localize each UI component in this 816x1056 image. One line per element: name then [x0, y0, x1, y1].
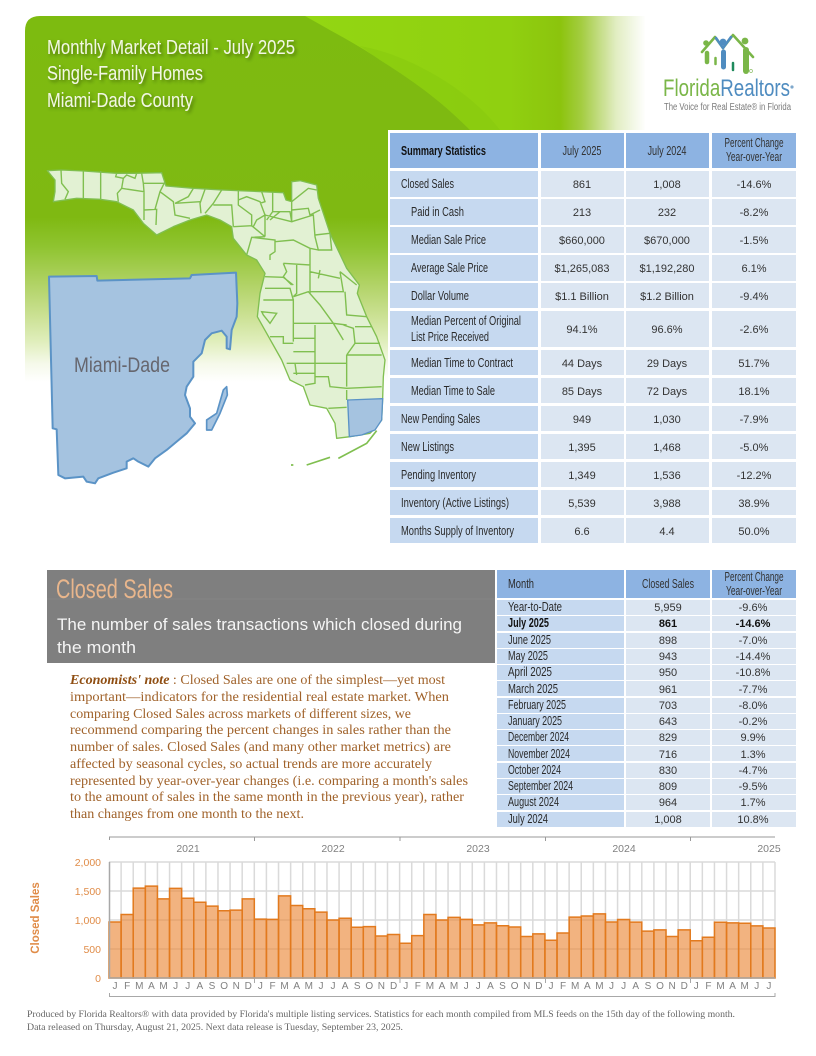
- row: Inventory (Active Listings): 3,988: [653, 498, 681, 510]
- highlighted county on state map: [348, 399, 383, 437]
- row: Pending Inventory: Pending Inventory: [401, 468, 477, 482]
- county lines: [61, 170, 382, 408]
- row: May 2025: [497, 649, 796, 664]
- x-axis baseline and ticks: [109, 862, 775, 996]
- row: Year-to-Date: [497, 600, 796, 615]
- row: May 2025: -14.4%: [736, 651, 771, 663]
- year axis with bracket and labels: 2023: [466, 843, 490, 855]
- row: Paid in Cash: 213: [573, 207, 591, 219]
- panel: monthly closed sales table: [497, 570, 796, 827]
- row: October 2024: 830: [659, 765, 677, 777]
- title: Single-Family Homes: [47, 63, 203, 85]
- row: Year-to-Date: Year-to-Date: [508, 600, 562, 614]
- title: Miami-Dade County: [47, 90, 193, 112]
- table header row: July 2025: [562, 144, 602, 158]
- row: Pending Inventory: [390, 462, 796, 487]
- heading: Closed Sales: Closed Sales: [56, 574, 173, 604]
- row: Paid in Cash: -8.2%: [740, 207, 769, 219]
- row: February 2025: [497, 698, 796, 713]
- row: February 2025: February 2025: [508, 698, 566, 712]
- footer note: Data released on Thursday, August 21, 2025. Next data release is Tuesday, September 23, 2025.: [27, 1022, 403, 1032]
- row: Median Percent of Original List Price Received: 94.1%: [566, 324, 598, 336]
- row: September 2024: September 2024: [508, 779, 573, 793]
- subheading description: the month: [57, 638, 136, 657]
- row: July 2025: July 2025: [508, 616, 549, 630]
- monthly table header: Percent Change: [724, 570, 784, 584]
- monthly table header: Closed Sales: [642, 577, 694, 591]
- row: Median Time to Sale: [390, 378, 796, 403]
- text block: economists' note: represented by year-over-year changes (i.e. comparing a month's sales: [70, 773, 468, 788]
- row: July 2024: 10.8%: [737, 814, 769, 826]
- row: Median Sale Price: $670,000: [644, 235, 690, 247]
- row: July 2024: [497, 812, 796, 827]
- row: Median Time to Contract: [390, 350, 796, 375]
- row: October 2024: October 2024: [508, 763, 561, 777]
- row: July 2025: [497, 616, 796, 631]
- table header row: Year-over-Year: [726, 150, 782, 164]
- row: Paid in Cash: 232: [658, 207, 676, 219]
- table header row: Summary Statistics: [401, 144, 486, 158]
- row: September 2024: [497, 779, 796, 794]
- text block: economists' note: affected by seasonal cycles, so actual trends are more accurately: [70, 756, 432, 771]
- monthly table header: [497, 570, 796, 598]
- row: Average Sale Price: Average Sale Price: [411, 261, 488, 275]
- row: April 2025: [497, 665, 796, 680]
- icon: Florida Realtors logo: [663, 35, 794, 113]
- title: [47, 37, 295, 112]
- row: Median Time to Contract: 51.7%: [738, 358, 770, 370]
- title: Monthly Market Detail - July 2025: [47, 37, 295, 59]
- icon: houses and people mark: [702, 35, 753, 72]
- row: January 2025: January 2025: [508, 714, 562, 728]
- row: Pending Inventory: 1,536: [653, 470, 681, 482]
- row: Months Supply of Inventory: [390, 518, 796, 543]
- row: Inventory (Active Listings): Inventory (Active Listings): [401, 496, 509, 510]
- year axis with bracket and labels: 2024: [612, 843, 636, 855]
- row: May 2025: May 2025: [508, 649, 548, 663]
- y-axis labels: [75, 857, 101, 985]
- row: Median Percent of Original List Price Received: List Price Received: [411, 330, 489, 344]
- row: New Listings: -5.0%: [740, 442, 769, 454]
- year axis with bracket and labels: 2022: [321, 843, 345, 855]
- y-axis labels: 0: [95, 973, 101, 985]
- row: Year-to-Date: 5,959: [654, 602, 682, 614]
- row: March 2025: 961: [659, 684, 677, 696]
- row: February 2025: -8.0%: [739, 700, 768, 712]
- year axis with bracket and labels: [110, 837, 781, 855]
- row: Median Sale Price: $660,000: [559, 235, 605, 247]
- row: January 2025: [497, 714, 796, 729]
- row: Closed Sales: [390, 171, 796, 197]
- row: Pending Inventory: 1,349: [568, 470, 596, 482]
- map label: Miami-Dade: Miami-Dade: [74, 354, 170, 377]
- row: Median Sale Price: Median Sale Price: [411, 233, 486, 247]
- row: July 2024: 1,008: [654, 814, 682, 826]
- row: September 2024: -9.5%: [739, 781, 768, 793]
- row: Dollar Volume: -9.4%: [740, 291, 769, 303]
- row: November 2024: 716: [659, 749, 677, 761]
- row: August 2024: 1.7%: [740, 797, 766, 809]
- row: Average Sale Price: [390, 255, 796, 281]
- month labels: JFMAMJJASONDJFMAMJJASONDJFMAMJJASONDJFMAMJJASONDJFMAMJJ: [112, 981, 771, 992]
- row: April 2025: 950: [659, 667, 677, 679]
- row: Closed Sales: -14.6%: [737, 179, 772, 191]
- row: Dollar Volume: $1.2 Billion: [640, 291, 694, 303]
- text block: economists' note: recommend comparing the percent changes in sales rather than the: [70, 722, 451, 737]
- row: March 2025: [497, 681, 796, 696]
- row: New Pending Sales: -7.9%: [740, 414, 769, 426]
- logo registered mark: [790, 85, 794, 89]
- row: Median Sale Price: [390, 227, 796, 253]
- row: August 2024: 964: [659, 797, 677, 809]
- text block: economists' note: than changes from one month to the next.: [70, 806, 304, 821]
- y-axis labels: 1,000: [75, 915, 101, 927]
- row: Months Supply of Inventory: Months Supply of Inventory: [401, 524, 515, 538]
- row: Median Percent of Original List Price Received: [390, 311, 796, 347]
- table header row: July 2024: [648, 144, 687, 158]
- row: July 2025: 861: [659, 618, 677, 630]
- row: Median Time to Sale: 72 Days: [647, 386, 688, 398]
- row: January 2025: 643: [659, 716, 677, 728]
- row: Median Time to Sale: Median Time to Sale: [411, 384, 495, 398]
- row: December 2024: 9.9%: [740, 732, 766, 744]
- text block: economists' note: comparing Closed Sales across markets of different sizes, we: [70, 706, 411, 721]
- text block: economists' note: [69, 672, 468, 821]
- row: October 2024: [497, 763, 796, 778]
- row: Median Time to Contract: 44 Days: [562, 358, 603, 370]
- row: Inventory (Active Listings): [390, 490, 796, 515]
- row: Average Sale Price: 6.1%: [741, 263, 767, 275]
- row: Inventory (Active Listings): 38.9%: [738, 498, 770, 510]
- row: Pending Inventory: -12.2%: [737, 470, 772, 482]
- text block: economists' note: Economists' note : Closed Sales are one of the simplest—yet most: [69, 672, 445, 687]
- map: Florida counties: [47, 170, 385, 465]
- row: New Pending Sales: 1,030: [653, 414, 681, 426]
- text block: economists' note: to the amount of sales in the same month in the previous year), rather: [70, 789, 465, 804]
- row: June 2025: June 2025: [508, 633, 551, 647]
- row: Median Percent of Original List Price Received: -2.6%: [740, 324, 769, 336]
- row: June 2025: 898: [659, 635, 677, 647]
- bar chart: monthly closed sales: [30, 837, 781, 996]
- row: April 2025: April 2025: [508, 665, 552, 679]
- row: Median Percent of Original List Price Received: 96.6%: [651, 324, 683, 336]
- row: Dollar Volume: $1.1 Billion: [555, 291, 609, 303]
- row: Closed Sales: 1,008: [653, 179, 681, 191]
- row: New Listings: 1,468: [653, 442, 681, 454]
- y-axis title: Closed Sales: [30, 882, 42, 954]
- row: New Pending Sales: New Pending Sales: [401, 412, 480, 426]
- row: November 2024: 1.3%: [740, 749, 766, 761]
- row: June 2025: -7.0%: [739, 635, 768, 647]
- panel: green header background: [25, 14, 646, 384]
- row: September 2024: 809: [659, 781, 677, 793]
- row: Average Sale Price: $1,265,083: [554, 263, 610, 275]
- row: Closed Sales: Closed Sales: [401, 177, 454, 191]
- year axis with bracket and labels: 2021: [176, 843, 200, 855]
- row: February 2025: 703: [659, 700, 677, 712]
- keys: [291, 431, 377, 465]
- row: August 2024: August 2024: [508, 795, 559, 809]
- row: New Pending Sales: 949: [573, 414, 591, 426]
- row: Median Time to Sale: 85 Days: [562, 386, 603, 398]
- row: Months Supply of Inventory: 50.0%: [738, 526, 770, 538]
- row: Median Time to Contract: 29 Days: [647, 358, 688, 370]
- table header row: Percent Change: [724, 136, 784, 150]
- row: June 2025: [497, 633, 796, 648]
- row: Dollar Volume: Dollar Volume: [411, 289, 469, 303]
- row: Median Time to Contract: Median Time to Contract: [411, 356, 513, 370]
- row: November 2024: November 2024: [508, 747, 570, 761]
- panel: summary statistics table: [388, 130, 800, 546]
- row: Dollar Volume: [390, 283, 796, 308]
- row: New Pending Sales: [390, 406, 796, 431]
- y-axis labels: 2,000: [75, 857, 101, 869]
- row: May 2025: 943: [659, 651, 677, 663]
- year axis with bracket and labels: 2025: [757, 843, 781, 855]
- row: July 2025: -14.6%: [736, 618, 771, 630]
- state outline: [47, 170, 385, 438]
- row: Median Percent of Original List Price Received: Median Percent of Original: [411, 314, 521, 328]
- row: March 2025: -7.7%: [739, 684, 768, 696]
- row: New Listings: New Listings: [401, 440, 454, 454]
- row: New Listings: 1,395: [568, 442, 596, 454]
- row: Paid in Cash: [390, 199, 796, 225]
- row: Paid in Cash: Paid in Cash: [411, 205, 464, 219]
- row: April 2025: -10.8%: [736, 667, 771, 679]
- map: enlarged Miami-Dade county: [49, 273, 237, 483]
- text block: economists' note: number of sales. Closed Sales (and many other market metrics) are: [70, 739, 451, 754]
- row: Inventory (Active Listings): 5,539: [568, 498, 596, 510]
- row: January 2025: -0.2%: [739, 716, 768, 728]
- row: November 2024: [497, 746, 796, 761]
- footer note: [27, 1009, 735, 1032]
- row: December 2024: [497, 730, 796, 745]
- row: August 2024: [497, 795, 796, 810]
- row: July 2024: July 2024: [508, 812, 548, 826]
- row: December 2024: December 2024: [508, 730, 569, 744]
- row: Median Sale Price: -1.5%: [740, 235, 769, 247]
- monthly table header: Year-over-Year: [726, 584, 782, 598]
- y-axis labels: 1,500: [75, 886, 101, 898]
- row: December 2024: 829: [659, 732, 677, 744]
- row: Months Supply of Inventory: 4.4: [659, 526, 675, 538]
- row: New Listings: [390, 434, 796, 459]
- text block: economists' note: important—indicators for the residential real estate market. When: [70, 689, 449, 704]
- row: March 2025: March 2025: [508, 682, 558, 696]
- logo wordmark: FloridaRealtors: [663, 75, 790, 102]
- y-axis labels: 500: [83, 944, 101, 956]
- row: Closed Sales: 861: [573, 179, 591, 191]
- monthly table header: Month: [508, 577, 534, 591]
- row: October 2024: -4.7%: [739, 765, 768, 777]
- row: Months Supply of Inventory: 6.6: [574, 526, 590, 538]
- table header row: [390, 133, 796, 168]
- row: Average Sale Price: $1,192,280: [639, 263, 695, 275]
- row: Median Time to Sale: 18.1%: [738, 386, 770, 398]
- panel: Closed Sales heading: [47, 570, 495, 663]
- bars: [109, 886, 775, 978]
- footer note: Produced by Florida Realtors® with data provided by Florida's multiple listing services. Statistics for each month compiled from MLS feeds on the 15th day of the following month.: [27, 1009, 735, 1019]
- subheading description: [57, 615, 462, 657]
- grid lines: [109, 862, 775, 978]
- row: Year-to-Date: -9.6%: [739, 602, 768, 614]
- subheading description: The number of sales transactions which closed during: [57, 615, 462, 634]
